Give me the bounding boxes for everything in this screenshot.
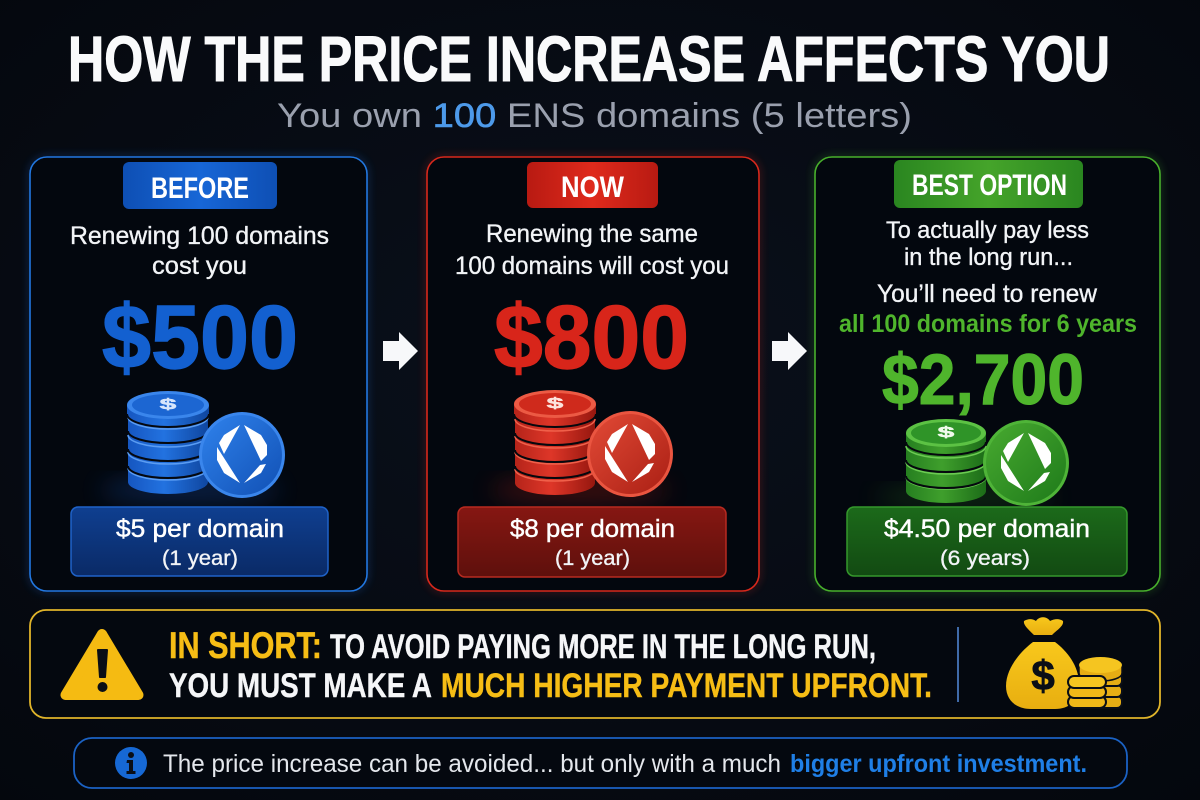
price box: $4.50 per domain: $4.50 per domain	[884, 515, 1090, 543]
arrow: now to best option	[772, 332, 807, 370]
price: 2,700: $2,700	[882, 341, 1084, 420]
price box: $4.50 per domain	[847, 507, 1127, 576]
price box: $5 per domain: $5 per domain	[116, 515, 284, 543]
icon: warning triangle	[66, 634, 138, 695]
icon: blue coin stack	[100, 391, 280, 502]
description: best option	[886, 217, 1089, 271]
callout text: YOU MUST MAKE A	[169, 667, 432, 705]
price box: $8 per domain: $8 per domain	[510, 515, 675, 543]
instruction: renew for 6 years	[839, 280, 1137, 338]
icon: green ENS coin	[983, 420, 1069, 506]
icon: info circle	[115, 747, 147, 779]
icon: red coin stack: $	[547, 395, 563, 412]
price box: $5 per domain	[71, 507, 328, 576]
badge: best option	[894, 160, 1083, 208]
badge: best option: BEST OPTION	[912, 169, 1067, 202]
price box: $5 per domain: (1 year)	[162, 547, 238, 570]
icon: money bag and coins: $	[1031, 652, 1055, 699]
badge: now	[527, 162, 658, 208]
info bar	[74, 738, 1127, 788]
info text: The price increase can be avoided... but only with a much	[163, 750, 781, 778]
icon: red ENS coin	[587, 411, 673, 497]
subtitle: You own 100 ENS domains (5 letters)	[277, 97, 912, 135]
callout text: IN SHORT:	[169, 625, 322, 666]
description: best option: in the long run...	[904, 244, 1073, 271]
description: now	[455, 220, 729, 280]
icon: money bag and coins	[1006, 617, 1122, 709]
instruction: renew for 6 years: all 100 domains for 6 years	[839, 310, 1137, 338]
icon: red coin stack	[490, 390, 670, 502]
icon: green coin stack: $	[938, 424, 954, 441]
price box: $4.50 per domain: (6 years)	[940, 547, 1030, 570]
price: 800: $800	[494, 288, 689, 388]
panel: before	[30, 157, 367, 591]
price: 500: $500	[102, 288, 298, 388]
price box: $8 per domain	[458, 507, 726, 577]
description: before: cost you	[152, 252, 247, 280]
description: now: 100 domains will cost you	[455, 252, 729, 280]
arrow: before to now	[383, 332, 418, 370]
callout text: MUCH HIGHER PAYMENT UPFRONT.	[441, 667, 932, 705]
badge: before: BEFORE	[151, 172, 249, 205]
callout: in short	[30, 610, 1160, 718]
panel: now	[427, 157, 759, 591]
description: before: Renewing 100 domains	[70, 222, 329, 250]
icon: blue ENS coin	[199, 412, 285, 498]
description: now: Renewing the same	[486, 220, 698, 248]
panel: best option	[815, 157, 1160, 591]
badge: now: NOW	[561, 171, 625, 204]
description: before	[70, 222, 329, 280]
callout text: TO AVOID PAYING MORE IN THE LONG RUN,	[330, 628, 876, 666]
info text: highlight: bigger upfront investment.	[790, 750, 1087, 778]
instruction: renew for 6 years: You’ll need to renew	[877, 280, 1098, 308]
badge: before	[123, 162, 277, 209]
callout text	[169, 625, 932, 705]
icon: blue coin stack: $	[160, 396, 176, 413]
price box: $8 per domain: (1 year)	[555, 547, 630, 570]
icon: green coin stack	[875, 419, 1055, 507]
description: best option: To actually pay less	[886, 217, 1089, 244]
